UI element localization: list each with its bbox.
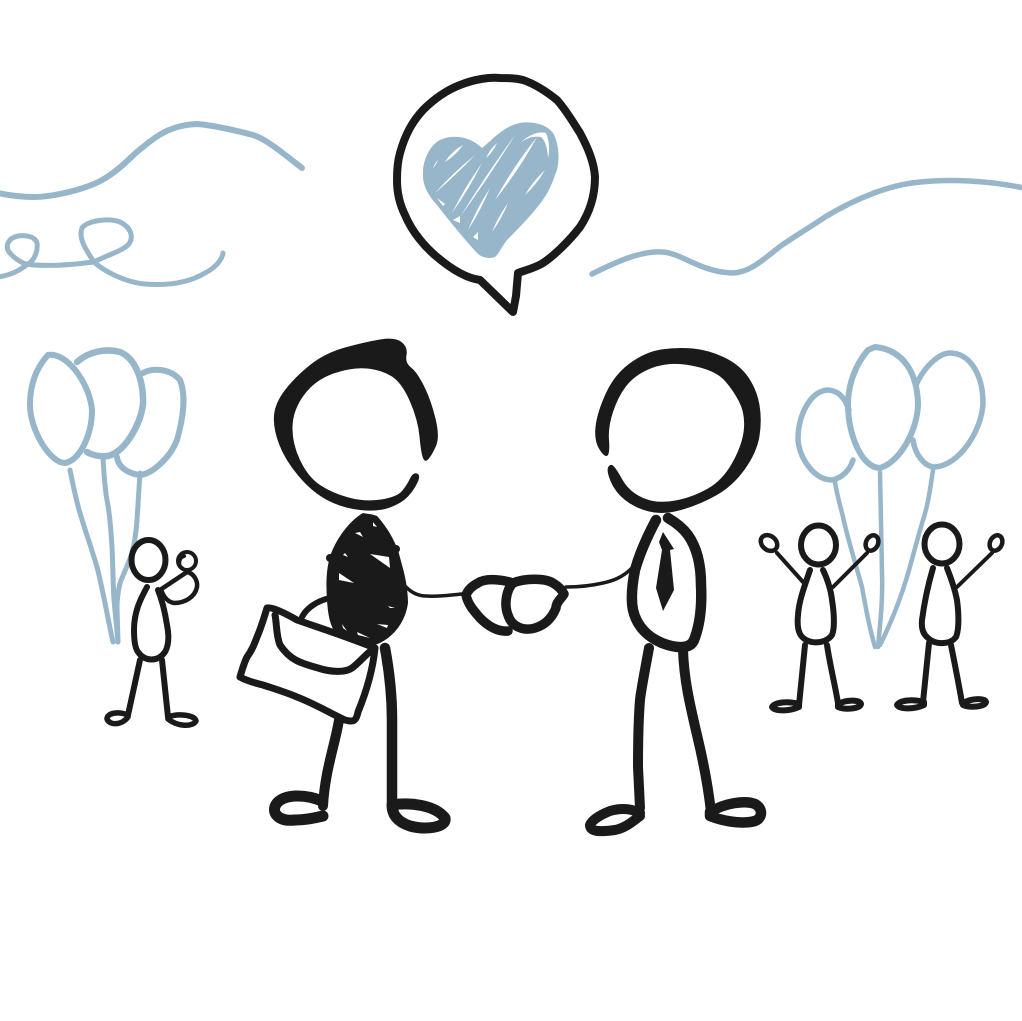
feet — [897, 700, 924, 708]
cloud line: right — [592, 181, 1022, 274]
feet — [107, 713, 128, 724]
left hand — [466, 580, 513, 631]
legs — [799, 645, 805, 705]
balloon three — [913, 353, 983, 467]
right foot — [710, 802, 761, 822]
legs — [923, 643, 929, 702]
hand — [987, 533, 1005, 553]
head — [801, 526, 836, 564]
briefcase strap — [302, 598, 330, 617]
cloud line: lower left loops — [0, 220, 223, 285]
arm — [957, 553, 992, 587]
cloud line: upper left — [0, 124, 302, 197]
briefcase — [240, 608, 375, 721]
left leg — [638, 648, 649, 808]
handshake — [466, 579, 564, 631]
left foot — [274, 796, 323, 820]
body — [798, 570, 834, 642]
body — [922, 568, 958, 643]
feet — [772, 702, 799, 710]
balloon one — [30, 355, 92, 463]
speech bubble — [397, 78, 595, 312]
tie — [656, 532, 674, 611]
balloon strings — [835, 482, 875, 647]
balloon two — [77, 350, 143, 456]
right leg — [683, 650, 711, 812]
small figure: right two — [897, 524, 1005, 708]
right balloons — [798, 347, 983, 647]
head — [595, 348, 761, 513]
icon: scribbled heart — [423, 122, 559, 258]
right leg — [385, 648, 392, 806]
balloon three — [117, 370, 184, 475]
left foot — [590, 809, 640, 831]
head — [132, 540, 166, 580]
arm — [566, 568, 632, 587]
balloon two — [848, 347, 918, 468]
left leg — [323, 720, 339, 806]
right foot — [392, 804, 445, 828]
right hand — [506, 579, 564, 629]
legs — [128, 660, 140, 715]
small figure: right one — [758, 526, 881, 710]
body — [632, 518, 701, 647]
dark scribbled body — [326, 513, 408, 645]
small figure: left — [107, 540, 197, 725]
hands — [758, 532, 780, 554]
body — [134, 587, 168, 660]
head — [924, 524, 960, 564]
arm — [160, 572, 197, 603]
left large figure — [240, 339, 462, 828]
balloon strings — [70, 470, 113, 642]
head with hair — [274, 339, 438, 511]
left balloons — [30, 350, 184, 642]
arms — [777, 553, 803, 582]
balloon one — [798, 390, 853, 480]
hand — [178, 552, 196, 570]
right large figure — [566, 348, 761, 831]
arm — [406, 587, 462, 596]
